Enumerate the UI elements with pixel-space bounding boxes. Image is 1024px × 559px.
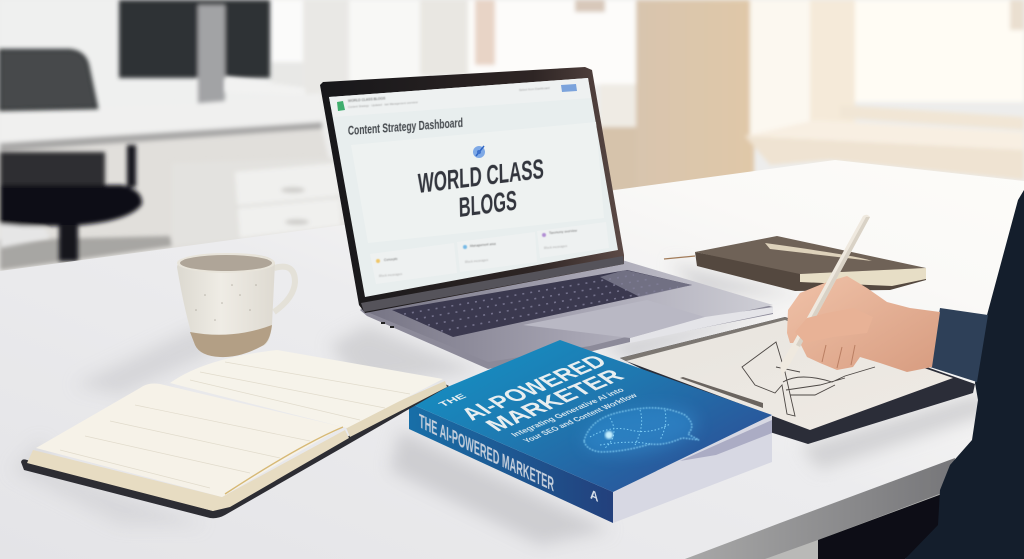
- brain illustration: [579, 399, 701, 463]
- spine logo: A: [590, 486, 599, 505]
- right page: [170, 350, 443, 428]
- main title on screen: WORLD CLASS: [418, 153, 544, 199]
- dashboard cards: [376, 228, 578, 278]
- book pages: [612, 415, 772, 523]
- person sleeve: [905, 190, 1024, 559]
- dark shadow under desk: [818, 491, 950, 559]
- compass logo: [473, 146, 485, 158]
- book spine: [409, 403, 613, 523]
- cover title: [436, 351, 630, 435]
- left page: [36, 384, 343, 497]
- book cover: [409, 340, 772, 492]
- notebook cover: [21, 384, 449, 518]
- mug handle: [274, 267, 295, 312]
- laptop screen bezel: [320, 67, 624, 313]
- desk: [0, 160, 1024, 559]
- laptop screen: [329, 78, 618, 297]
- tablet with sketch: [620, 317, 1000, 470]
- laptop: BLOGS: [459, 185, 517, 223]
- app header text: WORLD CLASS BLOGS: [348, 96, 386, 103]
- app icon: [337, 101, 345, 111]
- pencil on notebook: [765, 243, 872, 261]
- computer monitor: [119, 0, 270, 116]
- dashboard cards: Block messages: [465, 258, 489, 264]
- cover title: THE: [436, 392, 469, 408]
- soft shadows on desk: [12, 262, 800, 545]
- spine title: THE AI-POWERED MARKETER: [419, 411, 554, 497]
- floor below desk corner: [685, 440, 1024, 559]
- hand: [787, 276, 940, 372]
- laptop: [320, 67, 773, 369]
- dashboard heading: Content Strategy Dashboard: [348, 116, 463, 138]
- storage drawers: [0, 158, 342, 270]
- back desk: [0, 76, 345, 272]
- thumb over stylus: [795, 308, 873, 343]
- cover title: AI-POWERED: [455, 351, 613, 424]
- laptop base and keyboard: [360, 260, 773, 369]
- stylus: [780, 215, 870, 376]
- dashboard cards: Block messages: [379, 272, 403, 278]
- book: [409, 340, 772, 523]
- coffee mug: [177, 253, 295, 357]
- share button: [561, 84, 577, 92]
- knit cuff: [930, 308, 988, 382]
- dashboard cards: Concepts: [384, 257, 398, 262]
- cover subtitle: Integrating Generative AI into: [509, 386, 627, 438]
- cover subtitle: Your SEO and Content Workflow: [521, 392, 640, 444]
- notebook page edges: [27, 430, 349, 511]
- office chair: [0, 50, 142, 261]
- cover subtitle: [509, 386, 640, 444]
- dashboard cards: Taxonomy overview: [549, 228, 578, 235]
- tablet clip: [680, 377, 763, 408]
- closed notebook and pencil, right: [664, 236, 926, 291]
- laptop: Content Strategy · Updated · last Management overview: [348, 100, 419, 109]
- dashboard cards: Block messages: [544, 244, 568, 250]
- cover title: MARKETER: [480, 366, 630, 435]
- desk front edge: [685, 458, 955, 559]
- laptop: Select from Dashboard: [519, 86, 550, 92]
- sketch drawing: [742, 342, 875, 416]
- open notebook: [21, 350, 449, 518]
- dashboard cards: Management area: [470, 242, 496, 248]
